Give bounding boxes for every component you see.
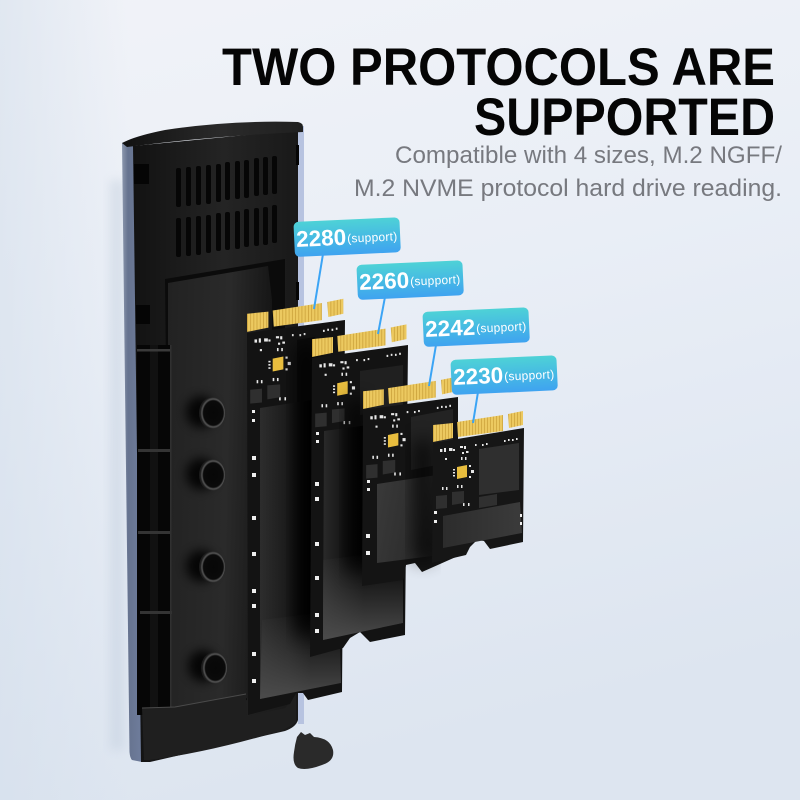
subtitle text block: Compatible with 4 sizes, M.2 NGFF/: [395, 142, 782, 169]
callout: 2260: [356, 260, 464, 300]
callout: 2260: 2260: [359, 268, 410, 295]
rubber plug: [294, 732, 333, 769]
callout: 2230: 2230: [453, 363, 504, 390]
title: [222, 38, 775, 147]
ventilation slots lower row: [176, 205, 277, 257]
2230 large chip: [443, 502, 522, 548]
callout: 2280: 2280: [296, 225, 347, 252]
side clips: [134, 145, 299, 324]
subtitle text block: M.2 NVME protocol hard drive reading.: [354, 175, 782, 202]
callout: 2230: [450, 355, 558, 395]
2242 large chip: [377, 472, 458, 563]
top cap: [122, 122, 303, 147]
subtitle text block: [354, 142, 782, 202]
callout: 2280: (support): [347, 229, 397, 246]
silver left edge: [122, 141, 142, 762]
left rail with compartments: [137, 345, 172, 715]
2230 edge components: [434, 511, 522, 525]
2260 chip highlight: [323, 550, 403, 640]
title: TWO PROTOCOLS ARE: [222, 38, 775, 97]
SSD 2260 board: [296, 324, 408, 657]
black inner body: [133, 130, 298, 762]
callout: 2242: 2242: [425, 315, 476, 342]
leader line: 2242: [429, 345, 436, 386]
ventilation slots upper row: [176, 156, 277, 207]
screw posts: [186, 396, 227, 684]
SSD 2242 board: [348, 377, 458, 586]
SSD 2230 board: [414, 411, 524, 563]
callout: 2242: [422, 307, 530, 347]
callout: 2260: (support): [410, 272, 460, 289]
bottom cap: [142, 694, 296, 760]
2280 large chip: [260, 400, 342, 699]
SSD 2280 board: [247, 299, 345, 715]
2280 edge components: [252, 410, 256, 683]
leader line: 2280: [314, 254, 323, 309]
2230 small chip: [479, 494, 497, 508]
callout: 2280: [293, 217, 401, 257]
silver right edge: [298, 126, 304, 724]
2230 upper chip: [479, 443, 519, 495]
2260 large chip: [323, 420, 405, 640]
callout: 2242: (support): [476, 319, 526, 336]
drive bay recess: [165, 259, 285, 714]
leader line: 2230: [473, 392, 478, 423]
callout: 2230: (support): [504, 367, 554, 384]
2280 chip highlight: [260, 610, 341, 699]
title: SUPPORTED: [474, 88, 775, 147]
2242 upper chip: [411, 409, 453, 470]
leader line: 2260: [378, 297, 385, 334]
2260 edge components: [315, 432, 319, 633]
2242 edge components: [366, 480, 370, 555]
2260 upper chip: [360, 365, 403, 415]
2280 shadowed chip block: [297, 337, 315, 403]
enclosure: M.2 drive case: [122, 122, 304, 762]
